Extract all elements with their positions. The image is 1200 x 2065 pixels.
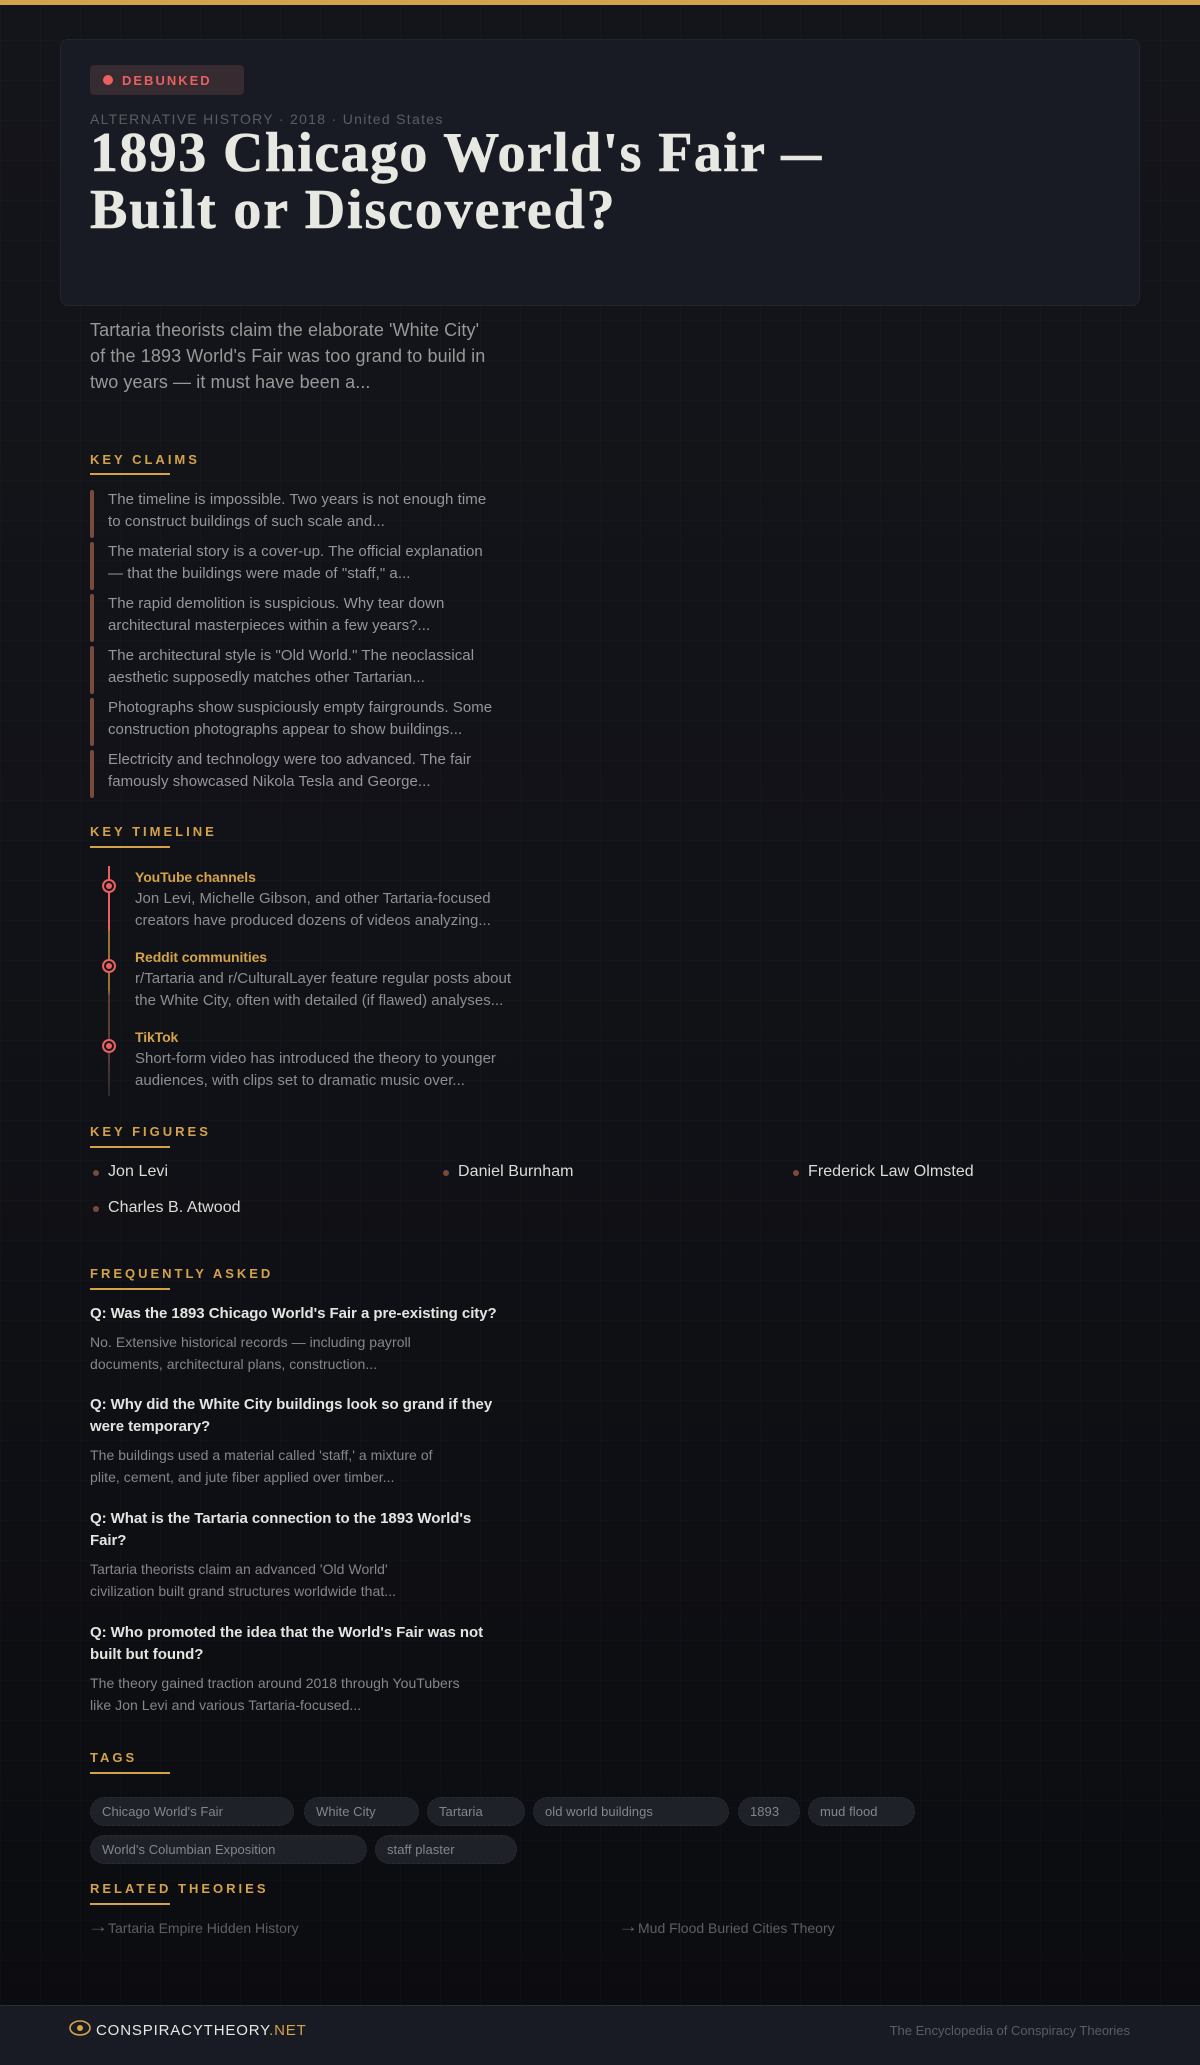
tag: White City [316,1804,376,1819]
tag [90,1797,294,1826]
claim 5 [90,698,492,746]
tag [427,1797,525,1826]
claim 6: famously showcased Nikola Tesla and George... [108,773,431,790]
FAQ answer 4: like Jon Levi and various Tartaria-focused... [90,1697,361,1713]
claim 4: The architectural style is "Old World." The neoclassical [108,647,474,664]
tag [90,1835,367,1864]
FAQ answer 3 [90,1561,396,1599]
panel: hero header [60,39,1140,306]
tag: Tartaria [439,1804,483,1819]
FAQ answer 1: No. Extensive historical records — including payroll [90,1334,411,1350]
FAQ answer 2 [90,1447,433,1485]
claim 3: The rapid demolition is suspicious. Why tear down [108,595,444,612]
FAQ answer 3: civilization built grand structures worldwide that... [90,1583,396,1599]
timeline item: Reddit communities: the White City, often with detailed (if flawed) analyses... [135,992,503,1009]
tag: 1893 [750,1804,779,1819]
timeline item: TikTok [135,1029,496,1089]
FAQ question 4: built but found? [90,1646,203,1663]
top accent bar [0,0,1200,5]
tag [375,1835,517,1864]
claim 6: Electricity and technology were too advanced. The fair [108,751,471,768]
tag cloud [90,1797,915,1864]
claim 5: Photographs show suspiciously empty fairgrounds. Some [108,699,492,716]
claim 1: to construct buildings of such scale and... [108,513,385,530]
timeline node 3 [102,1038,116,1052]
tag [533,1797,729,1826]
FAQ question 3: Fair? [90,1532,126,1549]
tag: staff plaster [387,1842,455,1857]
icon: eye logo [69,2020,91,2036]
icon: status dot [103,75,113,85]
intro text: Tartaria theorists claim the elaborate 'White City' [90,320,479,340]
figure: Frederick Law Olmsted: Frederick Law Olmsted [808,1163,974,1180]
FAQ answer 2: The buildings used a material called 'staff,' a mixture of [90,1447,433,1463]
intro text: two years — it must have been a... [90,372,371,392]
claim 6 [90,750,471,798]
FAQ question 3: Q: What is the Tartaria connection to the 1893 World's [90,1510,471,1527]
claim 2: The material story is a cover-up. The official explanation [108,543,483,560]
claim 1: The timeline is impossible. Two years is not enough time [108,491,486,508]
related link: Mud Flood: → [618,1917,638,1936]
figure: Jon Levi: Jon Levi [108,1163,168,1180]
tag: World's Columbian Exposition [102,1842,275,1857]
heading: key figures: KEY FIGURES [90,1124,211,1139]
claim 3: architectural masterpieces within a few years?... [108,617,430,634]
timeline item: YouTube channels: YouTube channels [135,869,256,885]
category and location line: ALTERNATIVE HISTORY · 2018 · United States [90,111,444,127]
timeline item: TikTok: Short-form video has introduced the theory to younger [135,1050,496,1067]
tag: mud flood [820,1804,878,1819]
timeline item: TikTok: audiences, with clips set to dramatic music over... [135,1072,465,1089]
tag: Chicago World's Fair [102,1804,223,1819]
FAQ answer 2: plite, cement, and jute fiber applied over timber... [90,1469,395,1485]
figure: Charles B. Atwood: Charles B. Atwood [108,1199,241,1216]
related link: Tartaria: → [88,1917,108,1936]
title: Built or Discovered? [90,179,616,241]
tag [738,1797,800,1826]
heading: key timeline: KEY TIMELINE [90,824,217,839]
timeline node 2 [102,958,116,972]
FAQ answer 1 [90,1334,411,1372]
related link: Mud Flood: Mud Flood Buried Cities Theory [638,1920,835,1936]
heading: tags: TAGS [90,1750,137,1765]
FAQ answer 1: documents, architectural plans, construction... [90,1356,377,1372]
FAQ question 2: were temporary? [90,1418,210,1435]
title: — [781,122,822,184]
timeline line [108,866,110,1096]
claim 3 [90,594,444,642]
timeline item: Reddit communities [135,949,511,1009]
intro text: of the 1893 World's Fair was too grand to build in [90,346,485,366]
logo text: CONSPIRACYTHEORY.NET [96,2022,307,2039]
FAQ answer 4 [90,1675,460,1713]
claim 4 [90,646,474,694]
tag: old world buildings [545,1804,653,1819]
intro text [90,320,485,392]
title [90,122,822,241]
timeline node 1 [102,878,116,892]
panel: key claims list [90,490,492,798]
claim 5: construction photographs appear to show buildings... [108,721,462,738]
FAQ question 2 [90,1396,492,1435]
footer [0,2005,1200,2065]
FAQ answer 4: The theory gained traction around 2018 through YouTubers [90,1675,460,1691]
figure: Daniel Burnham: Daniel Burnham [458,1163,574,1180]
FAQ question 3 [90,1510,471,1549]
FAQ question 2: Q: Why did the White City buildings look so grand if they [90,1396,492,1413]
title: 1893 Chicago World's Fair [90,122,765,184]
timeline item: YouTube channels: creators have produced dozens of videos analyzing... [135,912,491,929]
FAQ question 4: Q: Who promoted the idea that the World's Fair was not [90,1624,483,1641]
heading: key claims: KEY CLAIMS [90,452,200,467]
timeline item: TikTok: TikTok [135,1029,178,1045]
tag [808,1797,915,1826]
heading: frequently asked: FREQUENTLY ASKED [90,1266,273,1281]
footer tagline: The Encyclopedia of Conspiracy Theories [890,2023,1130,2038]
FAQ question 1: Q: Was the 1893 Chicago World's Fair a pre-existing city? [90,1305,497,1322]
badge: debunked [90,65,244,95]
timeline item: Reddit communities: Reddit communities [135,949,267,965]
timeline item: Reddit communities: r/Tartaria and r/CulturalLayer feature regular posts about [135,970,511,987]
FAQ question 4 [90,1624,483,1663]
tag [304,1797,419,1826]
badge label: DEBUNKED [122,73,212,88]
claim 2: — that the buildings were made of "staff," a... [108,565,411,582]
FAQ answer 3: Tartaria theorists claim an advanced 'Old World' [90,1561,388,1577]
claim 4: aesthetic supposedly matches other Tartarian... [108,669,425,686]
claim 2 [90,542,483,590]
heading: related theories: RELATED THEORIES [90,1881,268,1896]
related link: Tartaria: Tartaria Empire Hidden History [108,1920,299,1936]
timeline item: YouTube channels: Jon Levi, Michelle Gibson, and other Tartaria-focused [135,890,491,907]
timeline item: YouTube channels [135,869,491,929]
claim 1 [90,490,486,538]
